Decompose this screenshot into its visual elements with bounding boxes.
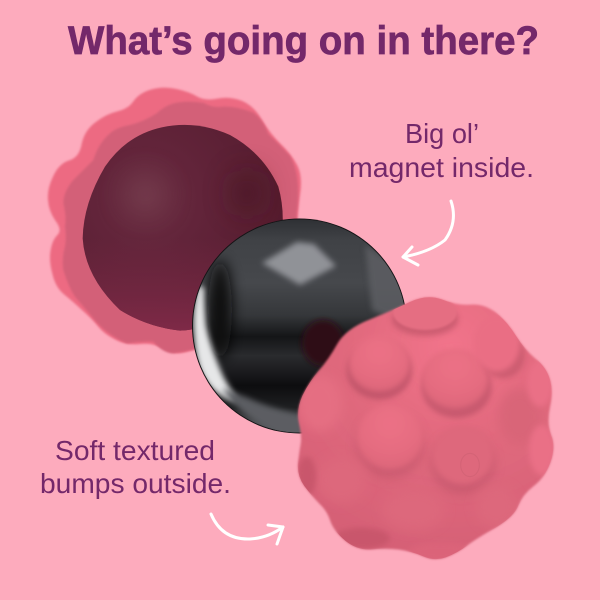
shell back edge [48, 88, 301, 353]
dark left shading [208, 260, 232, 360]
shell front rim [63, 102, 298, 353]
callout: magnet: magnet inside. [349, 152, 534, 183]
ball silhouette [298, 297, 553, 559]
callout: magnet: Big ol’ [405, 118, 479, 149]
open half shell [48, 88, 301, 353]
title: What’s going on in there? [68, 19, 539, 63]
bumpy outer ball [297, 295, 554, 561]
arrow: to magnet [403, 201, 453, 265]
lower grey reflection [220, 386, 300, 432]
dark red reflection [302, 320, 344, 366]
surface bumps [297, 295, 554, 561]
callout: magnet [349, 118, 534, 183]
white crescent [193, 285, 238, 402]
callout: bumps: Soft textured [55, 435, 215, 466]
magnet ball [192, 218, 405, 434]
arrow: to bumps [211, 514, 283, 544]
right reflection [365, 247, 404, 314]
callout: bumps [40, 435, 231, 499]
callout: bumps: bumps outside. [40, 468, 231, 499]
ball body shading [170, 200, 430, 450]
window highlight [262, 242, 336, 285]
shell inner cavity [83, 125, 283, 331]
